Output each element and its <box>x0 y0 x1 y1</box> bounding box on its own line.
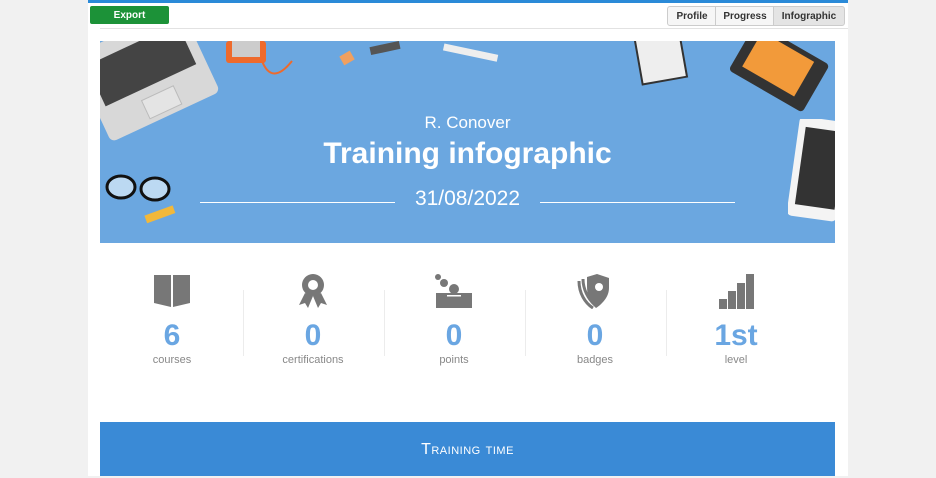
subtitle: name: R. Conover <box>424 113 510 132</box>
tab: profile: Profile <box>676 10 708 22</box>
icon: laptop <box>100 41 218 140</box>
stat: courses <box>153 275 191 366</box>
icon: shield <box>578 274 609 309</box>
icon: orange drive <box>226 41 293 74</box>
stat: points: points <box>439 354 469 366</box>
stat: courses: 6 <box>164 319 180 352</box>
tabs <box>667 6 845 26</box>
export button: Export <box>114 10 145 20</box>
icon: book <box>154 275 190 307</box>
stat: courses: courses <box>153 354 191 366</box>
stat: certifications <box>282 274 344 366</box>
icon: ribbon <box>299 274 327 308</box>
icon: points box <box>435 274 472 308</box>
icon: level bars <box>719 274 754 309</box>
stat: points: 0 <box>446 319 462 352</box>
icon: notebook <box>634 41 828 112</box>
stat: level: level <box>725 354 747 366</box>
tab: infographic: Infographic <box>782 10 836 22</box>
section header: training time: Training time <box>421 441 514 458</box>
export button <box>90 6 169 24</box>
tab: progress <box>715 6 775 26</box>
tab: infographic <box>773 6 845 26</box>
tab: profile <box>667 6 717 26</box>
icon: tablet <box>788 119 835 222</box>
section header: training time <box>100 422 835 476</box>
banner <box>100 41 835 243</box>
icon: glasses <box>106 174 176 224</box>
stat: certifications: 0 <box>305 319 321 352</box>
tab: progress: Progress <box>723 10 767 22</box>
date with lines: 31/08/2022 <box>415 187 520 210</box>
icon: markers <box>339 41 498 66</box>
stat: badges: 0 <box>587 319 603 352</box>
stat: level <box>714 274 758 366</box>
stat: certifications: certifications <box>282 354 344 366</box>
stat: badges: badges <box>577 354 613 366</box>
stat: points <box>435 274 472 366</box>
stat: level: 1st <box>714 319 758 352</box>
stat: badges <box>577 274 613 366</box>
title: Training infographic <box>323 137 612 170</box>
